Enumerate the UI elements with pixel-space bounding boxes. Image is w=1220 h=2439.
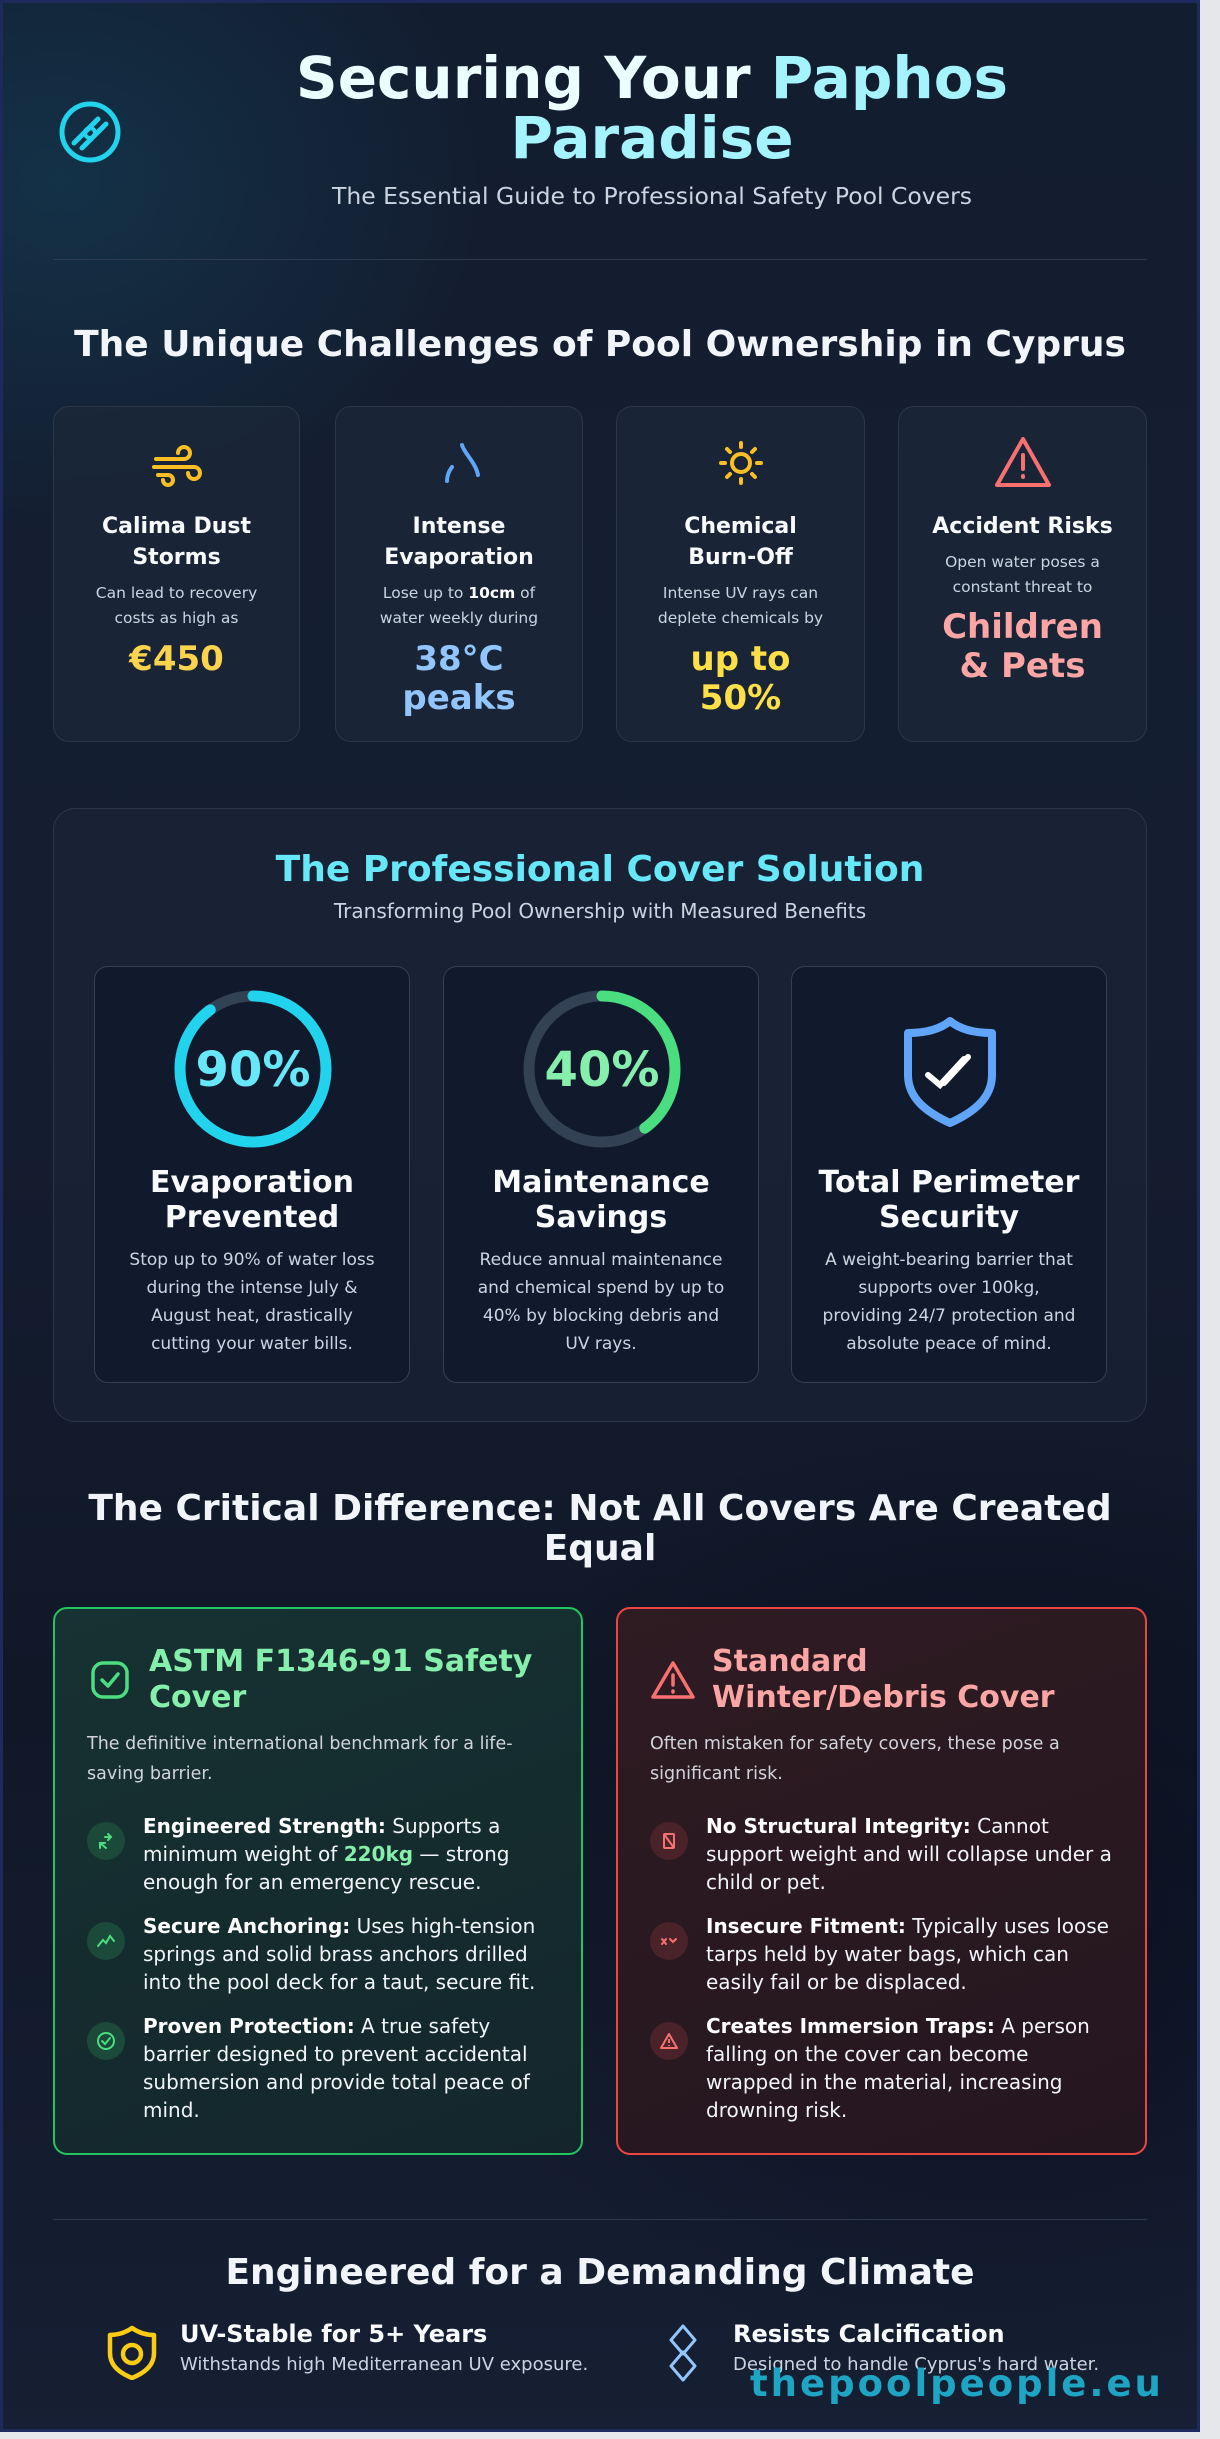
item: insecure fitment: Insecure Fitment: Typically uses loose tarps held by water bags, which can easily fail or be displaced. bbox=[706, 1914, 1109, 1994]
card: evaporation prevented bbox=[94, 966, 410, 1383]
icon: wind bbox=[152, 445, 202, 487]
header icon bbox=[60, 102, 120, 162]
card: chemical: Burn-Off bbox=[688, 545, 793, 570]
title: Securing Your Paphos Paradise bbox=[296, 44, 1008, 172]
card: maintenance savings: Reduce annual maintenance and chemical spend by up to 40% by blocking debris and UV rays. bbox=[478, 1250, 724, 1354]
heading: challenges: The Unique Challenges of Pool Ownership in Cyprus bbox=[74, 324, 1126, 365]
card: accident: Accident Risks bbox=[932, 514, 1113, 539]
icon: diamonds bbox=[670, 2324, 696, 2382]
heading: ASTM F1346-91 Safety Cover bbox=[149, 1644, 532, 1715]
item: immersion traps: Creates Immersion Traps: A person falling on the cover can become wrapped in the material, increasing drowning risk. bbox=[706, 2014, 1090, 2122]
card: perimeter security bbox=[791, 966, 1107, 1383]
card: chemical: up to bbox=[690, 639, 790, 679]
card: perimeter security: A weight-bearing barrier that supports over 100kg, providing 24/7 protection and absolute peace of mind. bbox=[823, 1250, 1075, 1354]
ring chart 40%: 40% bbox=[545, 1042, 659, 1098]
card: evaporation prevented: Prevented bbox=[165, 1200, 339, 1235]
panel subtitle: Transforming Pool Ownership with Measured Benefits bbox=[334, 899, 866, 923]
icon: check shield bbox=[91, 1661, 129, 1699]
feature: UV stable bbox=[108, 2320, 588, 2380]
card: chemical bbox=[616, 406, 865, 742]
card: evaporation: 38°C bbox=[414, 639, 504, 679]
card: evaporation: Intense bbox=[413, 514, 505, 539]
icon: shield check bbox=[904, 1017, 996, 1127]
panel: ASTM safety cover bbox=[53, 1607, 583, 2155]
card: evaporation prevented: Evaporation bbox=[150, 1165, 354, 1200]
icon: warning bbox=[995, 436, 1052, 487]
intro: Often mistaken for safety covers, these pose a significant risk. bbox=[650, 1734, 1060, 1784]
heading bbox=[712, 1644, 1055, 1715]
card: calima dust bbox=[53, 406, 300, 742]
item: no structural integrity: No Structural Integrity: Cannot support weight and will collapse under a child or pet. bbox=[706, 1814, 1112, 1894]
ring chart 90% bbox=[174, 990, 332, 1148]
panel: professional solution bbox=[53, 808, 1147, 1422]
subtitle: The Essential Guide to Professional Safety Pool Covers bbox=[332, 182, 972, 210]
card: chemical: Intense UV rays can deplete chemicals by bbox=[658, 584, 823, 627]
heading: climate: Engineered for a Demanding Climate bbox=[225, 2252, 975, 2293]
card: chemical: Chemical bbox=[684, 514, 797, 539]
card: accident: Open water poses a constant threat to bbox=[945, 553, 1100, 596]
item: proven protection: Proven Protection: A true safety barrier designed to prevent accidental submersion and provide total peace of mind. bbox=[143, 2014, 530, 2122]
feature: calcification: Designed to handle Cyprus's hard water. bbox=[733, 2354, 1099, 2375]
icon: drop bbox=[445, 443, 480, 483]
card: calima dust: Storms bbox=[132, 545, 221, 570]
watermark: thepoolpeople.eu bbox=[750, 2362, 1164, 2405]
card: evaporation bbox=[335, 406, 583, 742]
card: accident: Children bbox=[942, 607, 1103, 647]
icon: shield bbox=[108, 2326, 156, 2380]
heading: Standard bbox=[712, 1644, 868, 1679]
card: evaporation: Lose up to 10cm of water weekly during bbox=[380, 584, 538, 627]
card: perimeter security: Total Perimeter bbox=[819, 1165, 1079, 1200]
card: calima dust: €450 bbox=[129, 639, 224, 679]
card: evaporation: Evaporation bbox=[384, 545, 534, 570]
card: accident: & Pets bbox=[960, 646, 1085, 686]
ring chart 90%: 90% bbox=[196, 1042, 310, 1098]
heading: Winter/Debris Cover bbox=[712, 1680, 1055, 1715]
icon: warning bbox=[651, 1661, 695, 1699]
feature: UV stable: UV-Stable for 5+ Years bbox=[180, 2320, 487, 2348]
feature: calcification bbox=[670, 2320, 1099, 2382]
heading: critical difference: The Critical Difference: Not All Covers Are Created Equal bbox=[88, 1488, 1112, 1569]
panel: standard winter cover bbox=[616, 1607, 1147, 2155]
panel heading: The Professional Cover Solution bbox=[276, 849, 924, 890]
card: evaporation prevented: Stop up to 90% of water loss during the intense July & August heat, drastically cutting your water bills. bbox=[129, 1250, 375, 1354]
card: accident bbox=[898, 406, 1147, 742]
card: perimeter security: Security bbox=[879, 1200, 1019, 1235]
feature: UV stable: Withstands high Mediterranean UV exposure. bbox=[180, 2354, 588, 2375]
item: engineered strength: Engineered Strength: Supports a minimum weight of 220kg — strong enough for an emergency rescue. bbox=[143, 1814, 509, 1894]
card: chemical: 50% bbox=[700, 678, 781, 718]
card: calima dust: Calima Dust bbox=[102, 514, 251, 539]
feature: calcification: Resists Calcification bbox=[733, 2320, 1005, 2348]
icon: sun bbox=[719, 441, 763, 485]
card: evaporation: peaks bbox=[402, 678, 516, 718]
card: calima dust: Can lead to recovery costs as high as bbox=[96, 584, 257, 627]
card: maintenance savings: Maintenance bbox=[492, 1165, 710, 1200]
item: secure anchoring: Secure Anchoring: Uses high-tension springs and solid brass anchors drilled into the pool deck for a taut, secure fit. bbox=[143, 1914, 535, 1994]
card: maintenance savings: Savings bbox=[535, 1200, 667, 1235]
ring chart 40% bbox=[524, 990, 680, 1148]
card: maintenance savings bbox=[443, 966, 759, 1383]
intro: The definitive international benchmark for a life-saving barrier. bbox=[87, 1734, 513, 1784]
